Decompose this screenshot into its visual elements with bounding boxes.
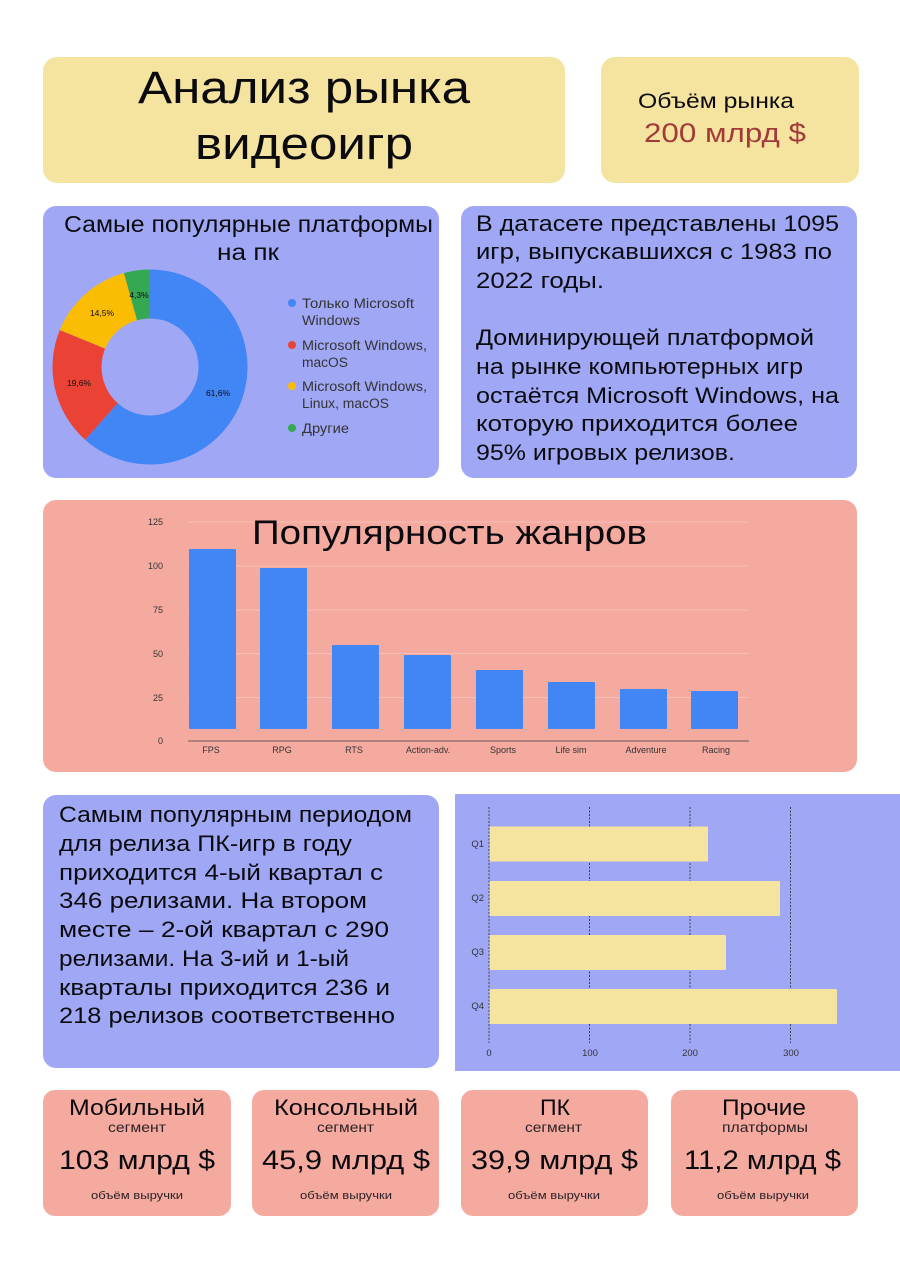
panel: mobile segment: 103 млрд $ bbox=[59, 1145, 215, 1175]
text block: dataset description: игр, выпускавшихся с 1983 по bbox=[476, 239, 832, 264]
bar chart: genres: Adventure bbox=[625, 745, 667, 755]
heading: market analysis bbox=[138, 62, 471, 169]
text block: dataset description: которую приходится более bbox=[476, 411, 798, 436]
panel: PC segment: объём выручки bbox=[508, 1190, 600, 1202]
panel: market size bbox=[601, 57, 859, 183]
bar chart: quarters: 300 bbox=[783, 1048, 799, 1059]
legend: platforms bbox=[288, 296, 427, 436]
text block: release periods: месте – 2-ой квартал с 290 bbox=[59, 917, 389, 942]
bar chart: genres: RPG bbox=[272, 745, 292, 755]
panel: genre popularity bbox=[43, 500, 857, 772]
panel: other platforms segment: платформы bbox=[722, 1120, 808, 1135]
donut chart: platforms: 4,3% bbox=[129, 290, 149, 300]
bar chart: genres: Sports bbox=[490, 745, 517, 755]
bar chart: quarters: Q4 bbox=[471, 1001, 484, 1012]
bar chart: genres: 25 bbox=[153, 693, 163, 703]
text block: release periods: кварталы приходится 236 и bbox=[59, 975, 390, 1000]
text block: dataset description: остаётся Microsoft Windows, на bbox=[476, 383, 840, 408]
panel: dataset description bbox=[461, 206, 857, 478]
text block: dataset description: Доминирующей платформой bbox=[476, 325, 814, 350]
panel: console segment bbox=[252, 1090, 439, 1216]
text block: release periods: Самым популярным периодом bbox=[59, 802, 412, 827]
panel: other platforms segment: 11,2 млрд $ bbox=[684, 1145, 841, 1175]
bar chart: quarters: 200 bbox=[682, 1048, 698, 1059]
bar chart: quarters bbox=[471, 807, 837, 1059]
panel: release period description bbox=[43, 795, 439, 1068]
legend: platforms: Только Microsoft bbox=[302, 296, 414, 311]
panel: quarterly releases chart bbox=[455, 794, 900, 1071]
bar chart: quarters: 0 bbox=[486, 1048, 492, 1059]
text block: dataset description: В датасете представлены 1095 bbox=[476, 211, 839, 236]
donut chart: platforms: 14,5% bbox=[90, 308, 114, 318]
bar chart: genres: 75 bbox=[153, 605, 163, 615]
donut chart: platforms: 19,6% bbox=[67, 378, 91, 388]
bar chart: quarters: 100 bbox=[582, 1048, 598, 1059]
panel: title bbox=[43, 57, 565, 183]
bar chart: quarters: Q3 bbox=[471, 947, 484, 958]
heading: market analysis: Анализ рынка bbox=[138, 62, 471, 113]
text block: release periods bbox=[59, 802, 412, 1028]
panel: console segment: 45,9 млрд $ bbox=[262, 1145, 430, 1175]
panel: other platforms segment: Прочие bbox=[722, 1095, 806, 1120]
bar chart: genres: Action-adv. bbox=[406, 745, 450, 755]
legend: platforms: macOS bbox=[302, 355, 348, 370]
panel: console segment: сегмент bbox=[317, 1120, 374, 1135]
bar chart: genres: 50 bbox=[153, 649, 163, 659]
text block: release periods: приходится 4-ый квартал с bbox=[59, 860, 383, 885]
donut chart: platforms bbox=[53, 270, 248, 465]
text block: release periods: релизами. На 3-ий и 1-ый bbox=[59, 946, 349, 971]
panel: console segment: объём выручки bbox=[300, 1190, 392, 1202]
bar chart: genres: 0 bbox=[158, 736, 163, 746]
text block: dataset description: на рынке компьютерных игр bbox=[476, 354, 803, 379]
panel: mobile segment: объём выручки bbox=[91, 1190, 183, 1202]
legend: platforms: Microsoft Windows, bbox=[302, 338, 427, 353]
legend: platforms: Microsoft Windows, bbox=[302, 379, 427, 394]
panel: PC segment: ПК bbox=[540, 1095, 570, 1120]
label: market size: Объём рынка bbox=[638, 90, 794, 113]
bar chart: quarters: Q2 bbox=[471, 893, 484, 904]
heading: market analysis: видеоигр bbox=[195, 118, 413, 169]
bar chart: genres: Life sim bbox=[555, 745, 587, 755]
bar chart: genres: 125 bbox=[148, 517, 163, 527]
text block: dataset description: 95% игровых релизов. bbox=[476, 440, 735, 465]
panel: mobile segment bbox=[43, 1090, 231, 1216]
text block: release periods: 346 релизами. На втором bbox=[59, 888, 367, 913]
panel: other platforms segment bbox=[671, 1090, 858, 1216]
panel: console segment: Консольный bbox=[274, 1095, 418, 1120]
bar chart: genres: Racing bbox=[702, 745, 730, 755]
heading: platforms: на пк bbox=[217, 239, 280, 265]
text block: release periods: 218 релизов соответственно bbox=[59, 1003, 395, 1028]
value: market size: 200 млрд $ bbox=[644, 118, 806, 148]
donut chart: platforms: 61,6% bbox=[206, 388, 230, 398]
panel: PC segment: сегмент bbox=[525, 1120, 582, 1135]
bar chart: genres: FPS bbox=[202, 745, 220, 755]
legend: platforms: Linux, macOS bbox=[302, 396, 389, 411]
panel: PC segment bbox=[461, 1090, 648, 1216]
heading: platforms bbox=[64, 211, 433, 265]
bar chart: genres: 100 bbox=[148, 561, 163, 571]
panel: mobile segment: сегмент bbox=[108, 1120, 166, 1135]
heading: platforms: Самые популярные платформы bbox=[64, 211, 433, 237]
text block: dataset description: 2022 годы. bbox=[476, 268, 604, 293]
panel: other platforms segment: объём выручки bbox=[717, 1190, 809, 1202]
bar chart: genres: RTS bbox=[345, 745, 363, 755]
text block: release periods: для релиза ПК-игр в году bbox=[59, 831, 352, 856]
text block: dataset description bbox=[476, 211, 840, 465]
panel: mobile segment: Мобильный bbox=[69, 1095, 205, 1120]
panel: popular platforms bbox=[43, 206, 439, 478]
panel: PC segment: 39,9 млрд $ bbox=[471, 1145, 638, 1175]
legend: platforms: Windows bbox=[302, 313, 360, 328]
legend: platforms: Другие bbox=[302, 421, 349, 436]
heading: genre popularity: Популярность жанров bbox=[252, 514, 647, 552]
bar chart: quarters: Q1 bbox=[471, 839, 484, 850]
bar chart: genres bbox=[148, 517, 749, 755]
